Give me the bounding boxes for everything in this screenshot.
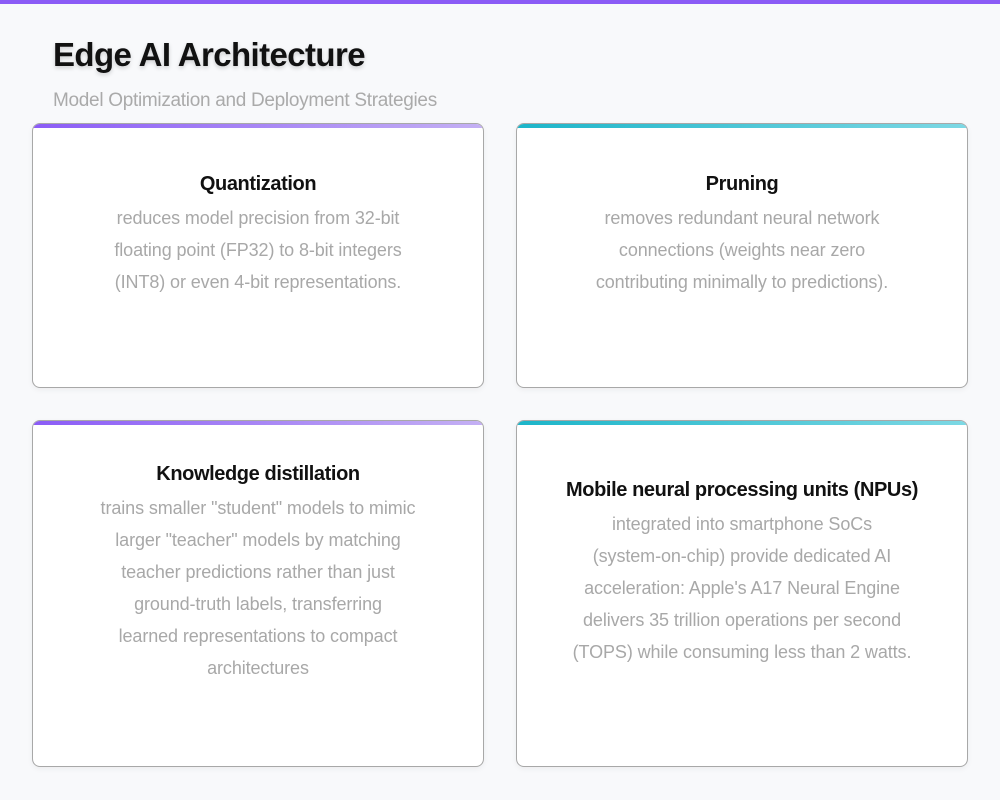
heading: pruning: Pruning [706,173,778,195]
text: knowledge distillation: teacher predictions rather than just [121,562,395,582]
text: pruning [596,208,888,292]
text: quantization: reduces model precision from 32-bit [117,208,399,228]
text: knowledge distillation: larger "teacher" models by matching [115,530,401,550]
text: quantization: floating point (FP32) to 8-bit integers [114,240,402,260]
text: NPUs: (system-on-chip) provide dedicated AI [593,546,891,566]
panel: quantization [32,123,484,388]
heading: knowledge distillation: Knowledge distillation [156,463,360,485]
text: pruning: contributing minimally to predictions). [596,272,888,292]
text: knowledge distillation [100,498,415,678]
text: knowledge distillation: trains smaller "student" models to mimic [101,498,415,518]
heading: quantization: Quantization [200,173,316,195]
text: quantization [114,208,402,292]
title: Edge AI Architecture [53,36,365,73]
panel: NPUs [516,420,968,767]
text: knowledge distillation: ground-truth labels, transferring [134,594,382,614]
text: NPUs: acceleration: Apple's A17 Neural Engine [584,578,900,598]
text: knowledge distillation: architectures [207,658,309,678]
subtitle: Model Optimization and Deployment Strategies [53,90,437,111]
panel: knowledge distillation [32,420,484,767]
heading: NPUs: Mobile neural processing units (NPUs) [566,479,918,501]
text: knowledge distillation: learned representations to compact [119,626,397,646]
text: quantization: (INT8) or even 4-bit representations. [115,272,401,292]
text: NPUs [573,514,911,662]
text: NPUs: integrated into smartphone SoCs [612,514,872,534]
text: pruning: removes redundant neural network [604,208,879,228]
text: NPUs: (TOPS) while consuming less than 2 watts. [573,642,911,662]
text: NPUs: delivers 35 trillion operations per second [583,610,901,630]
panel: pruning [516,123,968,388]
text: pruning: connections (weights near zero [619,240,865,260]
